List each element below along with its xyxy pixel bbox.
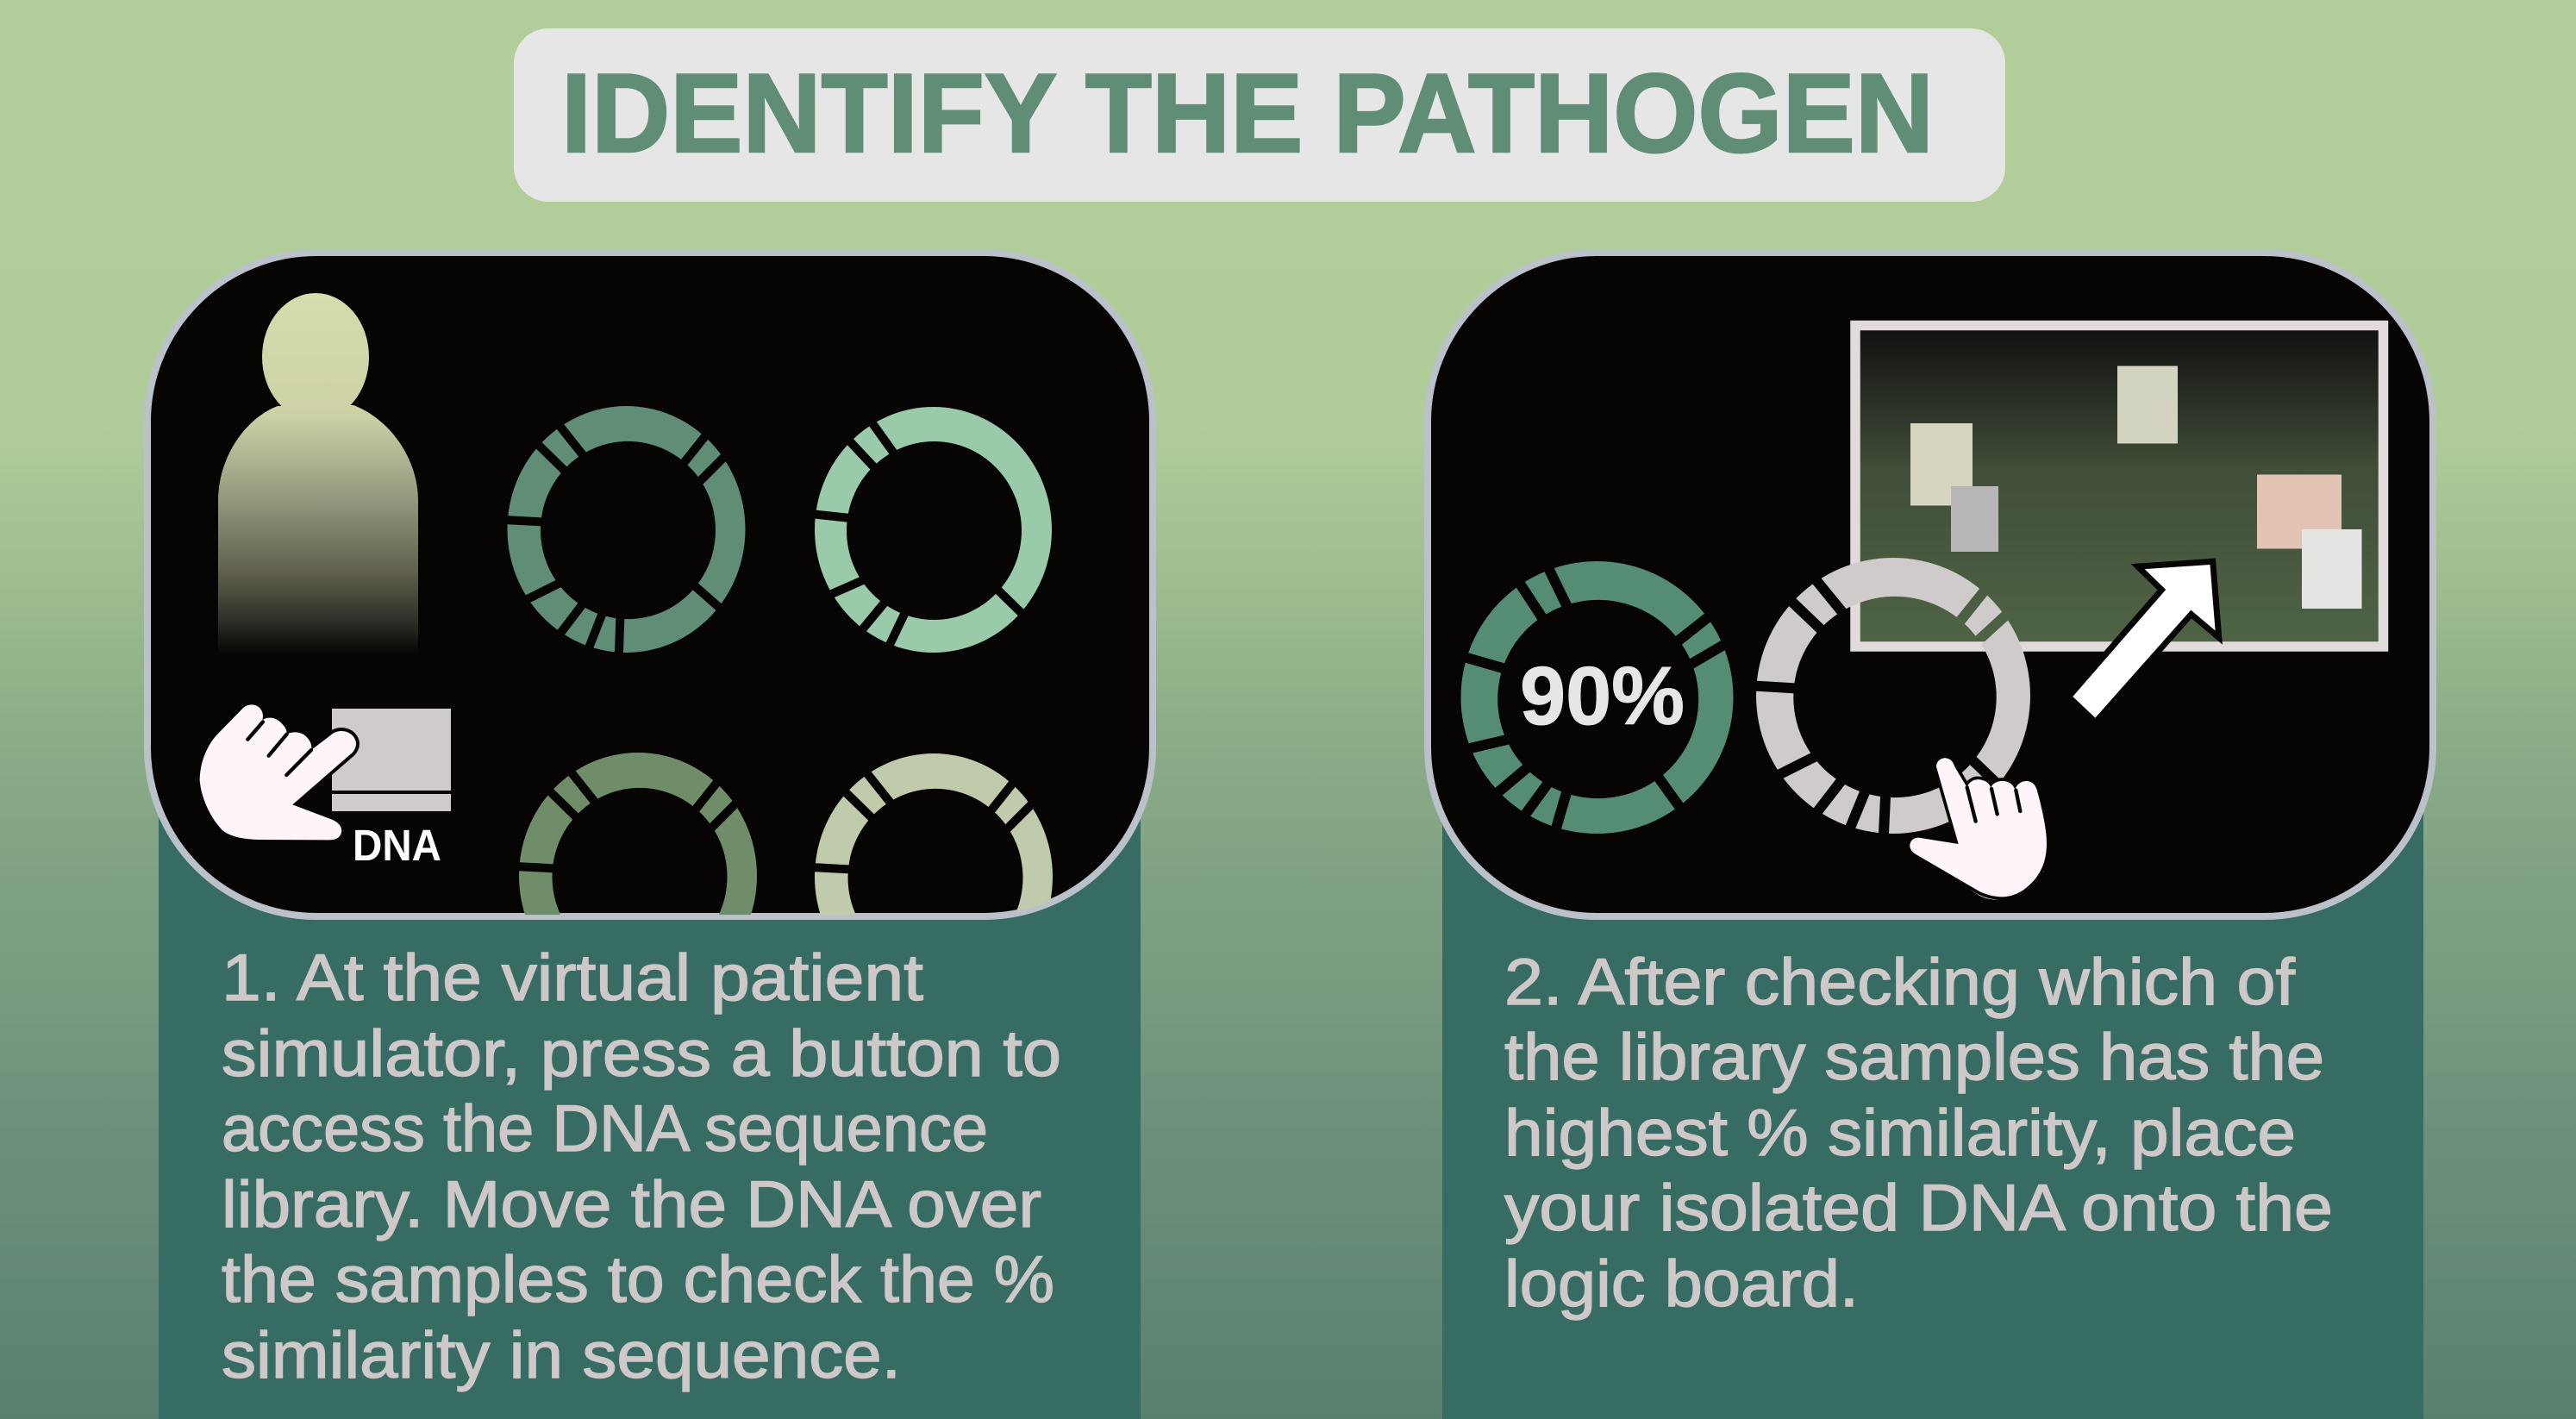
DNA sample ring 1 <box>507 406 745 653</box>
step 2 teal caption box <box>1442 776 2423 1419</box>
logic board <box>1855 326 2383 647</box>
step 1 black illustration panel <box>147 253 1153 916</box>
step 1 instructions: library. Move the DNA over <box>222 1168 1041 1241</box>
step 1 teal caption box <box>159 776 1141 1419</box>
DNA sample ring 2 <box>815 407 1052 653</box>
step 1 instructions: access the DNA sequence <box>222 1092 988 1166</box>
grey DNA ring being dragged <box>1756 558 2030 834</box>
step 2 instructions: the library samples has the <box>1504 1021 2324 1094</box>
icon: hand dragging ring <box>1910 758 2047 899</box>
sticky note: light grey <box>2302 529 2362 609</box>
panel: step 2 <box>1428 253 2433 1419</box>
DNA button <box>332 709 451 811</box>
title banner <box>514 28 2005 202</box>
step 2 black illustration panel <box>1428 253 2433 916</box>
step 2 instructions: highest % similarity, place <box>1504 1097 2296 1170</box>
step 2 instructions: your isolated DNA onto the <box>1504 1172 2333 1245</box>
step 1 instructions: simulator, press a button to <box>222 1017 1061 1091</box>
arrow to logic board <box>2073 565 2216 718</box>
panel: step 1 <box>147 253 1153 1419</box>
step 1 instructions: similarity in sequence. <box>222 1319 901 1392</box>
sticky note: pink <box>2257 474 2342 548</box>
sticky note: top <box>2117 366 2178 443</box>
sticky note: left grey <box>1951 486 1998 552</box>
step 2 instructions: logic board. <box>1504 1247 1859 1321</box>
icon: pointing hand pressing button <box>200 704 356 840</box>
step 1 instructions: 1. At the virtual patient <box>222 941 923 1015</box>
patient silhouette <box>218 293 418 653</box>
DNA label: DNA <box>353 821 441 870</box>
DNA sample rings 3 and 4, cropped by panel <box>519 753 1053 915</box>
step 2 instructions: 2. After checking which of <box>1504 946 2296 1019</box>
DNA sample ring 4 <box>815 753 1053 915</box>
sticky note: left cream <box>1910 423 1973 505</box>
step 1 instructions: the samples to check the % <box>222 1243 1054 1316</box>
90 percent label: 90% <box>1520 650 1685 742</box>
title text: IDENTIFY THE PATHOGEN <box>561 50 1934 176</box>
step 1 instructions <box>222 941 1061 1392</box>
similarity ring with 90 percent <box>1460 561 1733 834</box>
DNA sample ring 3 <box>519 753 757 915</box>
step 2 instructions <box>1504 946 2333 1321</box>
